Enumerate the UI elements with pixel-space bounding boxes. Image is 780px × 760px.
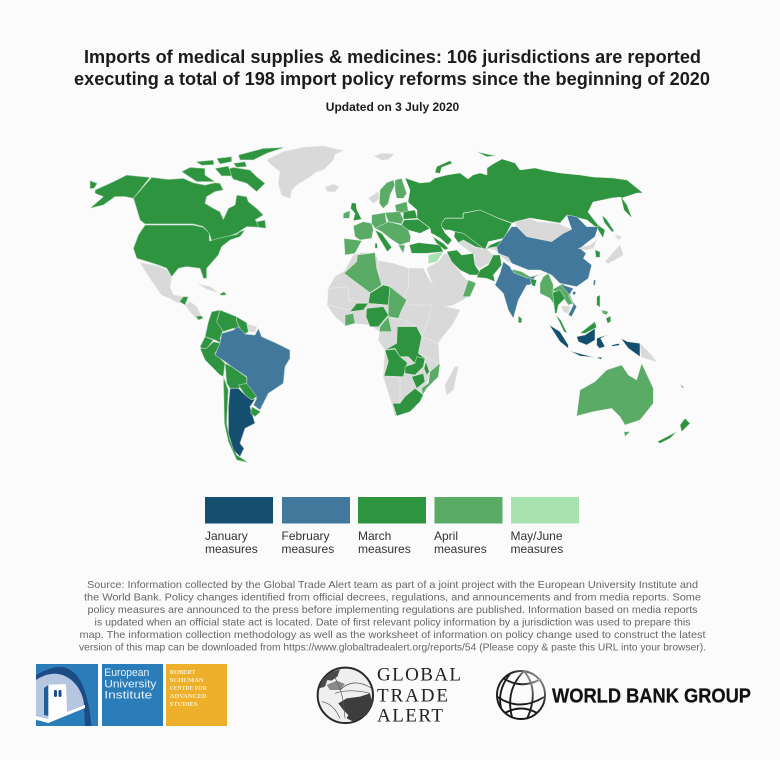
subtitle: update date: Updated on 3 July 2020 [326,100,460,114]
legend: April: April [434,529,458,543]
source note: the World Bank. Policy changes identified from official decrees, regulations, and announcements and from media reports. Some [84,592,701,604]
Mexico [140,263,183,303]
Bolivia [225,363,247,388]
Kazakhstan [442,210,512,250]
legend: January: January [205,529,248,543]
Tasmania [624,432,630,437]
Turkmenistan and Afghanistan [458,240,493,268]
legend: May/June: May/June [510,529,563,543]
Arabian Peninsula and Iraq [427,253,475,307]
New Caledonia [680,384,684,388]
Ecuador [200,337,213,348]
India [495,262,543,318]
Malawi [424,362,429,375]
Guyana [237,317,248,335]
Robert Schuman Centre panel: SCHUMAN [170,677,204,684]
Uruguay [251,407,261,417]
Africa base [327,253,460,416]
Spain and Portugal [344,238,362,255]
legend: February [282,497,350,556]
Nepal [513,269,530,278]
Chukotka [90,181,97,189]
Robert Schuman Centre panel [166,664,227,726]
Cameroon [379,317,392,332]
legend: March: March [358,529,391,543]
Global Trade Alert wordmark: ALERT [377,706,443,726]
source note: version of this map can be downloaded from https://www.globaltradealert.org/reports/54 (Please copy & paste this URL into your browser). [79,642,706,654]
Robert Schuman Centre panel: STUDIES [170,701,198,708]
Italy [375,230,392,252]
Europe [343,178,443,263]
EUI name panel: Institute [104,690,152,702]
Niger [368,285,390,305]
Baltic states [395,202,408,213]
Zambia [405,357,425,375]
Argentina [228,388,256,457]
Nigeria [366,307,388,327]
DR Congo [385,327,425,363]
Caribbean [198,284,227,295]
World Bank Group wordmark: WORLD BANK GROUP [552,686,751,708]
Caucasus [433,237,448,250]
Bangladesh [530,278,537,287]
source note: Source: Information collected by the Global Trade Alert team as part of a joint project with the European University Institute and [87,580,698,591]
Poland [385,212,403,224]
China [497,215,598,287]
Finland [395,178,407,198]
Indonesia [549,325,640,359]
Thailand [553,290,565,313]
source note [79,580,706,654]
Americas and Greenland [90,146,343,463]
Suriname and French Guiana [247,324,257,332]
Arctic Russian islands [435,152,496,173]
Global Trade Alert wordmark [377,664,461,726]
Mozambique [422,363,440,395]
logo: World Bank Group [497,671,751,719]
legend: March [358,497,426,556]
Chile [223,377,248,463]
Canadian Arctic islands [182,147,285,228]
icon: globe with trade routes [318,668,373,723]
Paraguay [238,383,257,400]
Greenland [267,146,343,198]
Colombia [205,310,223,343]
source note: is updated when an official state act is located. Date of first relevant policy information by a jurisdiction was used to prepare this [94,618,690,628]
legend: February: February [282,529,330,543]
logo: European University Institute [36,664,227,726]
Zimbabwe [412,373,425,388]
Sri Lanka [518,316,522,323]
Southeast Asia [540,273,657,362]
contiguous United States [133,225,245,278]
Peru [200,342,225,377]
Alaska [90,175,150,208]
legend: April [434,497,502,556]
Venezuela [217,310,242,332]
legend: May/June [510,497,579,556]
Svalbard [374,153,394,160]
Ireland [343,211,350,218]
EUI name panel [102,664,163,726]
Central and South Asia [433,210,512,282]
Panama [196,316,203,320]
Robert Schuman Centre panel: ROBERT [170,669,196,676]
North Korea [578,240,597,250]
EUI name panel: University [104,679,157,691]
Central Europe and Balkans [375,222,411,245]
Oman [463,280,476,297]
New Zealand [657,418,690,443]
Central America [185,302,202,320]
Sardinia [375,243,377,248]
Angola [384,349,407,377]
Chad [388,287,407,318]
Norway [368,192,379,203]
world map [90,146,690,463]
Taiwan [593,280,596,285]
legend: January [205,497,273,556]
Africa and Western Asia [325,153,476,416]
South Korea [595,250,600,257]
icon: World Bank globe [497,671,545,719]
Guatemala [179,297,188,305]
Ukraine [402,219,430,233]
Kashmir [487,247,510,263]
France [353,222,373,240]
Australia [577,363,653,425]
Iran [447,250,482,275]
legend: January: measures [205,542,258,556]
Sweden [379,180,395,208]
EUI name panel: European [104,667,149,679]
Algeria [344,253,382,293]
gray country borders in Africa [328,261,438,403]
source note: policy measures are announced to the press before implementing regulations are published. Information based on media reports [88,605,698,616]
Malaysia [556,315,597,333]
Mongolia [515,218,572,242]
Philippines [597,295,611,323]
Global Trade Alert wordmark: GLOBAL [377,664,461,686]
Ivory Coast [345,313,355,326]
icon: EUI tower emblem [36,664,98,726]
Pakistan [477,255,502,282]
Robert Schuman Centre panel: ADVANCED [170,693,207,700]
Global Trade Alert wordmark: TRADE [377,686,448,706]
logo: Global Trade Alert [318,664,461,726]
legend: May/June: measures [510,542,563,556]
legend: April: measures [434,542,487,556]
Brazil [215,327,290,410]
legend [205,497,579,556]
Vietnam [560,284,577,317]
Cambodia [562,306,570,313]
Papua New Guinea [640,343,657,362]
title: executing a total of 198 import policy reforms since the beginning of 2020 [74,69,710,89]
Belarus [403,210,417,219]
title [74,47,710,89]
Burkina Faso [350,303,368,312]
legend: March: measures [358,542,411,556]
United Kingdom [351,203,362,221]
South Africa [393,388,423,416]
Laos [552,283,573,305]
Germany [372,213,387,228]
legend: February: measures [282,542,334,556]
Madagascar [445,367,458,395]
Sakhalin [602,215,614,232]
Russia [405,159,643,245]
Greece [398,245,405,253]
Turkey [409,243,443,253]
East Asia and Oceania [495,215,690,443]
Hainan [573,292,576,295]
Myanmar [540,273,555,313]
Canada [133,177,265,242]
Robert Schuman Centre panel: CENTRE FOR [170,685,207,692]
source note: map. The information collection methodology as well as the worksheet of information on policy change used to construct the latest [80,630,706,641]
Uzbekistan [454,232,503,250]
Japan [605,235,623,263]
title: Imports of medical supplies & medicines: 106 jurisdictions are reported [84,47,701,67]
Iceland [325,184,339,192]
Syria [428,252,443,263]
